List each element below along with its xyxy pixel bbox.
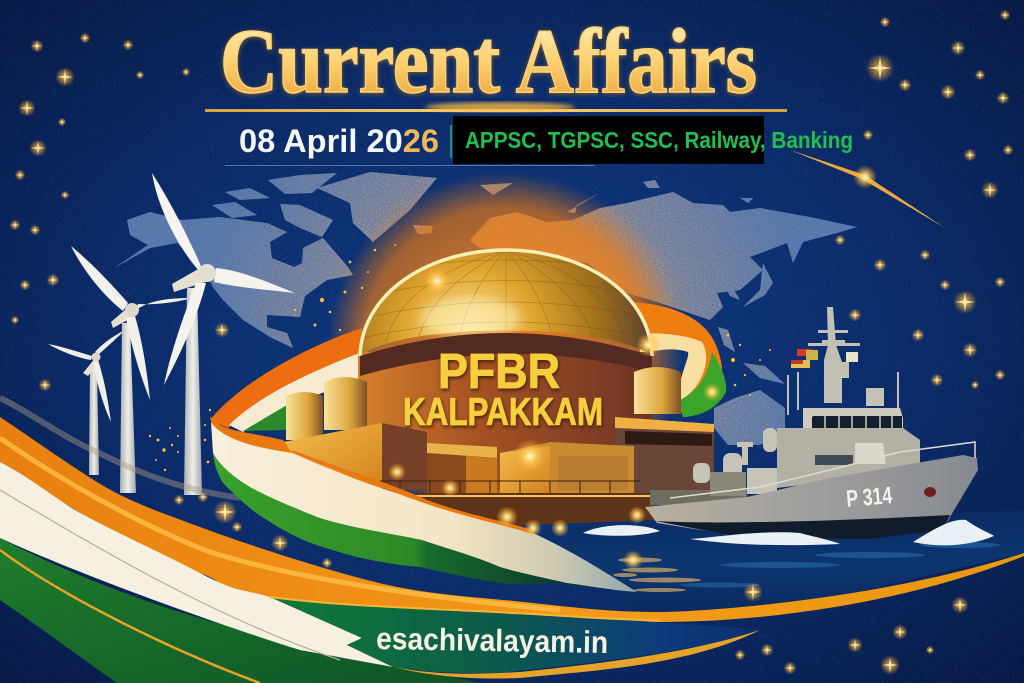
turbine: small bbox=[48, 330, 125, 475]
map: arctic islands bbox=[212, 173, 337, 237]
fence bbox=[380, 481, 640, 493]
reactor belt bbox=[360, 333, 652, 376]
orange glow around reactor bbox=[327, 172, 683, 528]
left building bbox=[283, 423, 427, 490]
map: greenland bbox=[317, 172, 437, 242]
banner gold edge bbox=[393, 630, 760, 679]
reactor dome bbox=[360, 250, 652, 356]
ship radar housing bbox=[866, 388, 884, 406]
reactor drum bbox=[358, 352, 652, 490]
ship flags bbox=[791, 349, 858, 368]
ribbon white band bbox=[211, 422, 637, 592]
ship forward equipment bbox=[855, 443, 886, 464]
centre low building bbox=[427, 443, 497, 493]
turbine: medium bbox=[71, 246, 192, 493]
ribbon loop right bbox=[630, 302, 726, 417]
reactor complex bbox=[283, 250, 714, 526]
water reflections bbox=[613, 542, 1000, 592]
ship guns and domes bbox=[650, 428, 777, 505]
golden dust bbox=[149, 244, 771, 471]
PFBR: PFBR bbox=[438, 345, 560, 399]
banner green-blue bbox=[270, 597, 760, 673]
swoosh orange bbox=[0, 417, 1024, 622]
ship boot stripe bbox=[655, 515, 950, 539]
ship mast bbox=[787, 307, 899, 415]
flare sparkles bbox=[388, 333, 721, 570]
centre right building bbox=[500, 439, 634, 493]
ship bridge bbox=[777, 408, 920, 488]
swoosh gold pinstripe bbox=[0, 550, 260, 683]
turbine: large bbox=[152, 173, 295, 495]
tank 1 bbox=[286, 392, 323, 440]
ribbon orange edge bbox=[210, 416, 535, 534]
ship rail bbox=[670, 442, 975, 498]
tricolour ribbon: front sweep bbox=[210, 416, 637, 592]
title underline bbox=[205, 102, 787, 112]
map: northern islands and japan bbox=[480, 180, 773, 307]
plinth bbox=[415, 493, 655, 526]
wind turbines bbox=[48, 173, 295, 495]
exam list box bbox=[450, 116, 853, 164]
map: australia bbox=[714, 390, 785, 445]
right building bbox=[615, 417, 714, 493]
ribbon loop left bbox=[210, 328, 362, 432]
ribbon green band bbox=[213, 452, 637, 592]
swoosh white bbox=[0, 462, 393, 667]
faint ribbon behind turbines bbox=[0, 398, 240, 498]
sea foam bbox=[583, 520, 994, 545]
ship anchor port bbox=[924, 487, 936, 497]
big flag swoosh bbox=[0, 417, 1024, 683]
map: iceland bbox=[413, 225, 433, 234]
banner top gold edge bbox=[270, 597, 660, 620]
shooting star bbox=[790, 150, 945, 228]
right cylinder tower bbox=[634, 367, 681, 414]
exam list: APPSC, TGPSC, SSC, Railway, Banking bbox=[465, 127, 853, 153]
title: Current Affairs bbox=[220, 10, 757, 112]
ship hull bbox=[645, 455, 978, 538]
swoosh highlight bbox=[0, 438, 560, 610]
map: north america bbox=[114, 212, 353, 348]
tank 2 bbox=[324, 377, 367, 430]
plant title bbox=[403, 345, 603, 434]
map: eurasia bbox=[470, 192, 857, 320]
map: indonesia and new guinea bbox=[718, 327, 785, 384]
tricolour ribbon: back loop bbox=[210, 302, 726, 432]
ship bbox=[645, 307, 978, 539]
swoosh green bbox=[0, 538, 480, 683]
date: 08 April 2026 bbox=[239, 123, 439, 159]
KALPAKKAM: KALPAKKAM bbox=[403, 391, 603, 434]
world map bbox=[114, 172, 857, 445]
swoosh pinstripes bbox=[0, 490, 340, 660]
water bbox=[540, 510, 1024, 616]
thin divider bbox=[225, 165, 595, 166]
website label: esachivalayam.in bbox=[376, 621, 608, 660]
ship hull number: P 314 bbox=[845, 482, 894, 513]
